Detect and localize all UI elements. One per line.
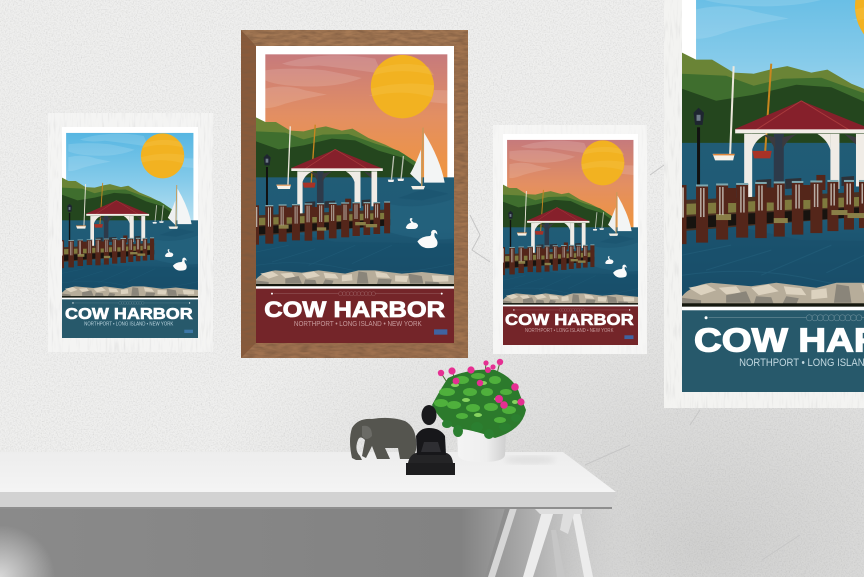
right frame xyxy=(493,125,647,354)
dark wall under table xyxy=(0,508,640,577)
table xyxy=(0,452,616,509)
elephant figurine xyxy=(350,418,416,460)
wood frame xyxy=(241,30,468,358)
left poster: blue: NORTHPORT • LONG ISLAND • NEW YORK xyxy=(84,321,174,327)
large frame xyxy=(664,0,864,408)
large cropped poster: blue xyxy=(664,0,864,408)
center poster: sunset in wood frame: NORTHPORT • LONG ISLAND • NEW YORK xyxy=(294,319,422,328)
center poster: sunset in wood frame: COW HARBOR xyxy=(264,297,445,322)
left poster: blue: COW HARBOR xyxy=(65,306,193,323)
left poster: blue xyxy=(48,113,213,352)
right poster: sunset in white frame: COW HARBOR xyxy=(505,312,634,329)
buddha statue xyxy=(406,405,455,475)
potted plant xyxy=(432,359,526,462)
pot xyxy=(457,430,506,462)
left frame xyxy=(48,113,213,352)
pot shadow xyxy=(504,456,556,464)
right poster: sunset in white frame: NORTHPORT • LONG ISLAND • NEW YORK xyxy=(525,328,614,334)
right poster: sunset in white frame xyxy=(493,125,647,354)
table legs xyxy=(485,508,593,577)
foliage xyxy=(432,362,526,439)
pink flowers xyxy=(438,359,525,409)
center poster: sunset in wood frame xyxy=(241,30,468,358)
